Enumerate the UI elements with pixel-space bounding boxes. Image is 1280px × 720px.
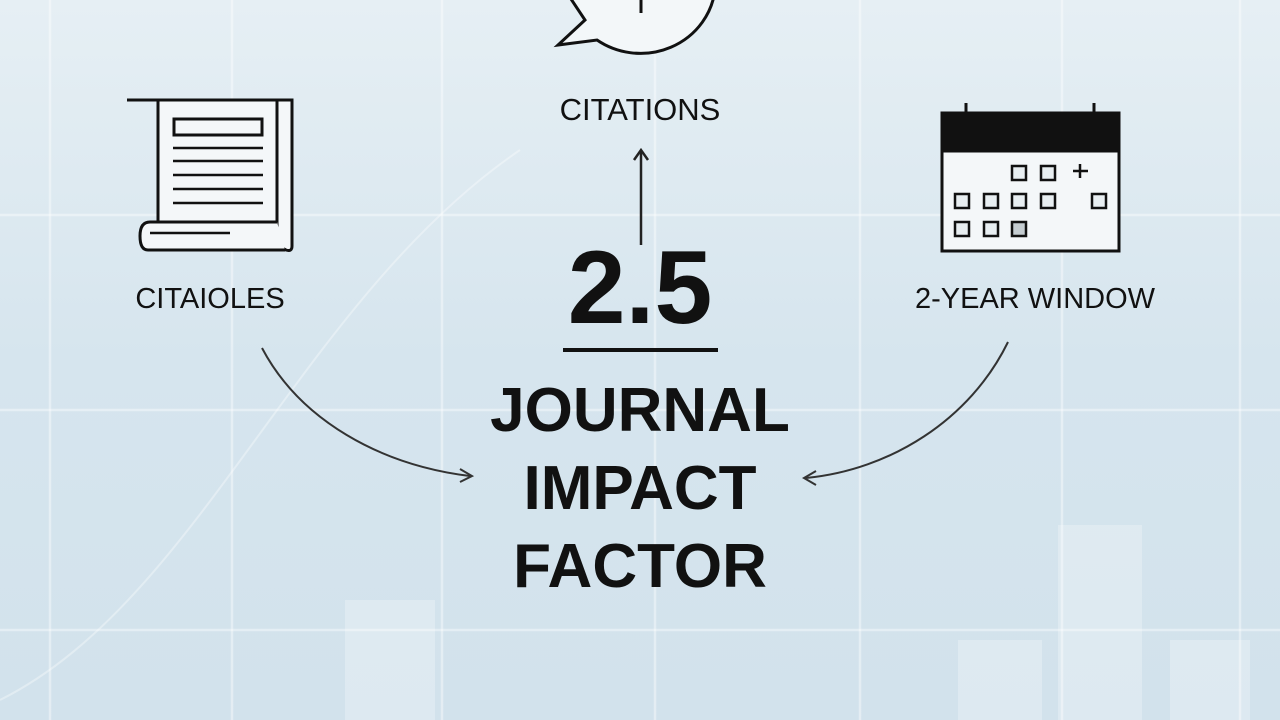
label: citations: CITATIONS <box>560 92 720 127</box>
arrow: right curve <box>804 342 1008 485</box>
title: journal impact factor: JOURNAL <box>490 376 790 445</box>
value: 2.5: 2.5 <box>568 230 712 346</box>
icon: calendar <box>942 103 1119 251</box>
label: citaioles: CITAIOLES <box>135 283 285 315</box>
title: journal impact factor <box>490 376 790 601</box>
icon: speech bubble <box>558 0 715 53</box>
title: journal impact factor: IMPACT <box>523 454 757 523</box>
arrow: up to citations <box>634 150 648 245</box>
underline <box>563 348 718 352</box>
label: 2-year window: 2-YEAR WINDOW <box>915 283 1155 315</box>
icon: document scroll <box>127 100 292 250</box>
title: journal impact factor: FACTOR <box>513 532 767 601</box>
arrow: left curve <box>262 348 472 482</box>
